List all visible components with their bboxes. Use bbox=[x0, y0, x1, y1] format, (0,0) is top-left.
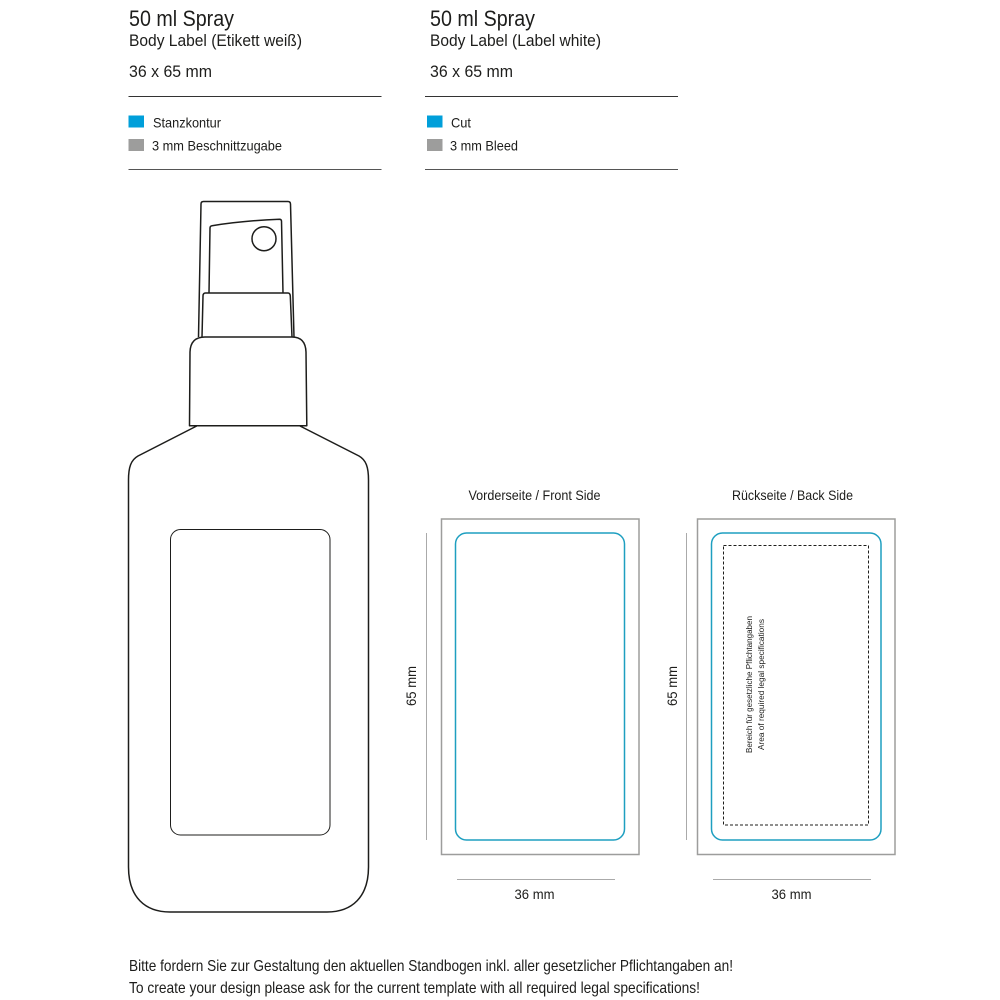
heading: back side: Rückseite / Back Side bbox=[732, 487, 853, 503]
text: legal area note: Area of required legal specifications bbox=[756, 619, 766, 750]
text: legal area note bbox=[744, 616, 766, 753]
dimension: height: 65 mm bbox=[403, 666, 419, 706]
panel: English header bbox=[425, 6, 678, 170]
bleed area bbox=[442, 519, 639, 854]
heading: front side: Vorderseite / Front Side bbox=[468, 487, 601, 503]
panel: front side template bbox=[403, 487, 639, 902]
bottle: body bbox=[128, 426, 368, 912]
bleed area bbox=[698, 519, 895, 854]
subheading: English label type: Body Label (Label white) bbox=[430, 31, 601, 50]
heading: German title: 50 ml Spray bbox=[129, 6, 234, 31]
dimension: height: 65 mm bbox=[664, 666, 680, 706]
bottle: spray head cover bbox=[198, 202, 294, 337]
legend: bleed colour German: 3 mm Beschnittzugabe bbox=[152, 138, 282, 154]
legend: cut colour German: Stanzkontur bbox=[153, 114, 221, 130]
legend: bleed colour English: 3 mm Bleed bbox=[450, 138, 518, 154]
bottle: nozzle opening bbox=[252, 227, 276, 251]
legal information area bbox=[724, 546, 868, 825]
panel: German header bbox=[128, 6, 382, 170]
illustration: spray bottle bbox=[128, 202, 368, 912]
legend: cut colour English: Cut bbox=[451, 114, 471, 130]
text: legal area note: Bereich für gesetzliche Pflichtangaben bbox=[744, 616, 754, 753]
bottle: screw cap bbox=[190, 337, 307, 426]
panel: back side template bbox=[664, 487, 895, 902]
legend: bleed colour English bbox=[427, 138, 518, 154]
footer note bbox=[129, 958, 733, 997]
bottle: nozzle bbox=[209, 219, 283, 293]
text: German size: 36 x 65 mm bbox=[129, 62, 212, 81]
dimension: width: 36 mm bbox=[772, 886, 812, 902]
legend: cut colour German bbox=[128, 114, 221, 130]
bottle: label area bbox=[170, 530, 330, 835]
legend: cut colour English bbox=[427, 114, 471, 130]
text: English size: 36 x 65 mm bbox=[430, 62, 513, 81]
bottle: collar bbox=[202, 293, 292, 337]
footer note: To create your design please ask for the current template with all required legal specifications! bbox=[129, 980, 700, 997]
cut contour bbox=[456, 533, 624, 840]
cut contour bbox=[712, 533, 881, 840]
heading: English title: 50 ml Spray bbox=[430, 6, 535, 31]
footer note: Bitte fordern Sie zur Gestaltung den aktuellen Standbogen inkl. aller gesetzlicher Pflichtangaben an! bbox=[129, 958, 733, 975]
subheading: German label type: Body Label (Etikett weiß) bbox=[129, 31, 302, 50]
dimension: width: 36 mm bbox=[514, 886, 554, 902]
